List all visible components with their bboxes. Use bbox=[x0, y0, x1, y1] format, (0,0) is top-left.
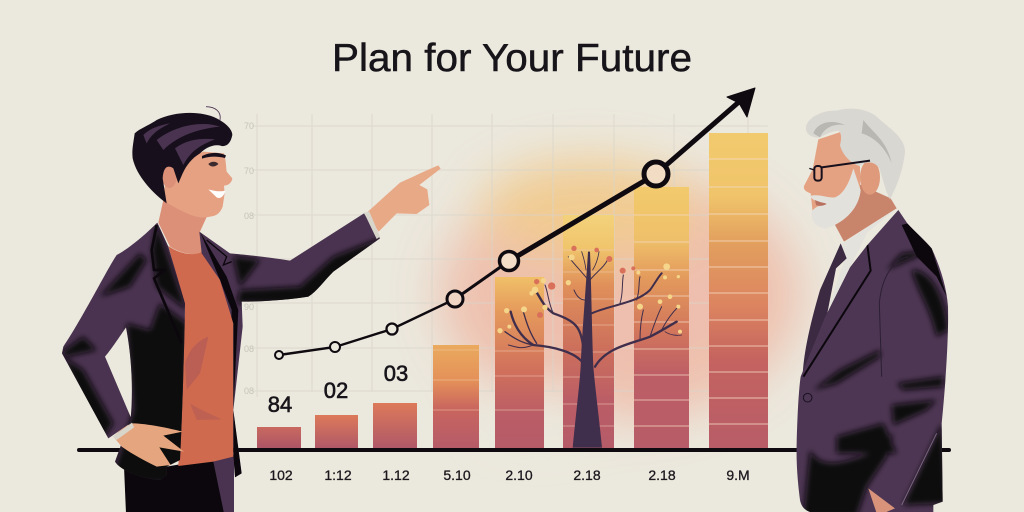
bar 4 bbox=[433, 345, 479, 448]
suit jacket bbox=[796, 210, 948, 512]
lapel edge bbox=[803, 245, 871, 377]
x-axis labels: 1:12 bbox=[324, 467, 352, 483]
mouth bbox=[815, 200, 827, 206]
marker 3 bbox=[386, 324, 398, 334]
shirt collar bbox=[825, 208, 897, 318]
jacket right bbox=[197, 210, 383, 483]
jacket left bbox=[62, 222, 185, 480]
head bbox=[132, 107, 232, 218]
x-axis labels: 2.18 bbox=[573, 467, 601, 483]
line thick bbox=[509, 101, 740, 261]
y-axis labels: 08 bbox=[244, 211, 254, 221]
bar value labels: 84 bbox=[268, 392, 292, 417]
y-axis labels bbox=[244, 121, 254, 396]
line bbox=[279, 299, 455, 355]
pointing hand bbox=[364, 165, 441, 239]
arrowhead bbox=[727, 88, 755, 117]
bar 8 bbox=[709, 133, 768, 448]
x-axis labels: 5.10 bbox=[443, 467, 471, 483]
jacket button bbox=[803, 393, 812, 402]
neck bbox=[158, 200, 208, 254]
bar value labels: 02 bbox=[324, 378, 348, 403]
y-axis labels: 08 bbox=[244, 344, 254, 354]
trend line with arrow bbox=[275, 88, 755, 359]
face bbox=[804, 132, 860, 223]
older man figure bbox=[790, 109, 957, 512]
marker 5 bbox=[500, 252, 518, 270]
chart grid bbox=[252, 114, 768, 397]
y-axis labels: 70 bbox=[244, 166, 254, 176]
marker 6 bbox=[644, 162, 668, 186]
ear bbox=[162, 163, 177, 188]
beard bbox=[810, 168, 861, 228]
bar 1 bbox=[257, 427, 301, 448]
trunk bbox=[573, 252, 602, 448]
bar 7 bbox=[634, 187, 689, 448]
bar 2 bbox=[315, 415, 358, 448]
axis baseline bbox=[77, 448, 951, 452]
line upper bbox=[455, 261, 509, 299]
x-axis labels: 2.18 bbox=[648, 467, 676, 483]
hair bbox=[806, 109, 905, 199]
neck bbox=[835, 183, 897, 242]
sleeve seam bbox=[879, 257, 908, 377]
left hand on hip bbox=[113, 423, 184, 467]
hair shading bbox=[813, 120, 892, 163]
hair bbox=[132, 113, 232, 203]
background glow bbox=[440, 160, 800, 435]
lapel edge bbox=[152, 225, 182, 343]
hand in pocket bbox=[868, 488, 895, 512]
jacket collar detail bbox=[207, 240, 232, 265]
x-axis labels: 2.10 bbox=[505, 467, 533, 483]
y-axis labels: 90 bbox=[244, 302, 254, 312]
ear bbox=[860, 160, 880, 195]
bar value labels bbox=[268, 361, 408, 417]
branches bbox=[505, 252, 682, 367]
x-axis labels: 102 bbox=[269, 467, 293, 483]
young man figure bbox=[50, 107, 441, 512]
tie and left lapel bbox=[803, 243, 847, 377]
face bbox=[163, 152, 232, 218]
x-axis labels bbox=[269, 467, 750, 483]
x-axis labels: 9.M bbox=[726, 467, 750, 483]
trousers bbox=[124, 455, 234, 512]
stray hair bbox=[206, 107, 220, 120]
bar 6 bbox=[563, 215, 614, 448]
x-axis labels: 1.12 bbox=[382, 467, 410, 483]
marker 4 bbox=[447, 291, 463, 307]
tree bbox=[497, 246, 682, 448]
eye and brow bbox=[202, 153, 226, 159]
t-shirt bbox=[168, 246, 233, 466]
bar 5 bbox=[495, 277, 544, 448]
bar 3 bbox=[373, 403, 417, 448]
marker 1 bbox=[275, 351, 283, 359]
bar value labels: 03 bbox=[384, 361, 408, 386]
shadow shapes bbox=[803, 250, 948, 512]
y-axis labels: 70 bbox=[244, 121, 254, 131]
title: Plan for Your Future bbox=[332, 37, 692, 80]
smile bbox=[208, 189, 225, 198]
blossoms bbox=[497, 254, 682, 334]
bar chart bbox=[257, 133, 768, 448]
glasses bbox=[809, 161, 870, 181]
marker 2 bbox=[330, 342, 340, 352]
sleeve edge bbox=[902, 433, 937, 505]
y-axis labels: 08 bbox=[244, 386, 254, 396]
